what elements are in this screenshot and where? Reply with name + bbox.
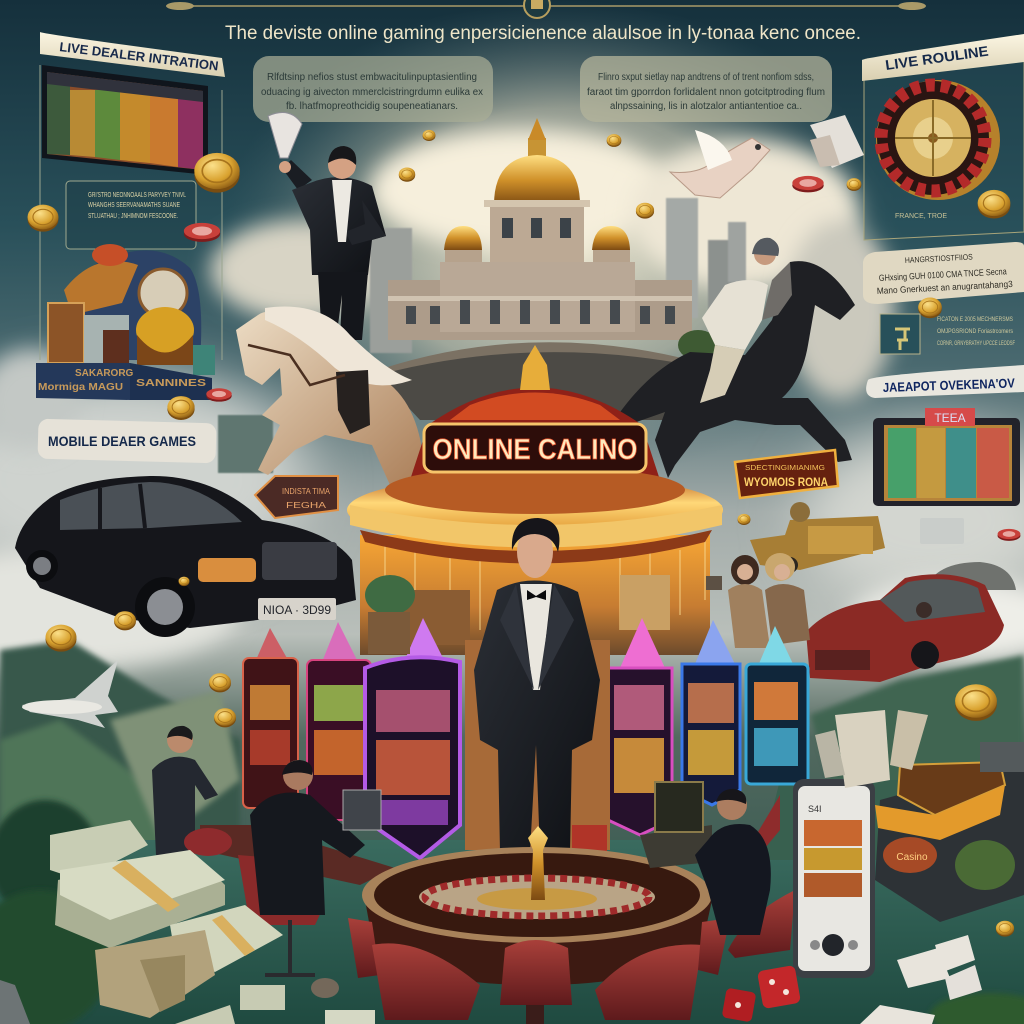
info text block — [66, 181, 196, 249]
slot 3 — [365, 618, 460, 858]
label: live dealer — [40, 32, 225, 77]
potted plant — [365, 575, 415, 654]
label: live roulette: LIVE ROULINE — [884, 43, 989, 73]
panel: live roulette — [862, 34, 1024, 398]
label: mobile dealer games — [38, 419, 216, 463]
mountains and landscape — [0, 640, 1024, 1024]
label: live dealer: LIVE DEALER INTRATION — [59, 39, 219, 73]
fan of cards — [268, 112, 302, 158]
callout: top left: Rlfdtsinp nefios stust embwacitulinpuptasientling — [267, 72, 477, 83]
callout: right: Mano Gnerkuest an anugrantahang3 — [877, 279, 1013, 296]
slot machines left — [243, 618, 460, 858]
icon: panel coin — [978, 190, 1010, 219]
dealer screen — [42, 65, 208, 175]
cards upper right — [810, 115, 864, 168]
slot 4 — [608, 618, 672, 835]
jackpot info text — [937, 316, 1015, 347]
caption: roulette: FRANCE, TROE — [895, 213, 947, 220]
red car — [806, 562, 1016, 682]
sign: online casino — [424, 424, 646, 472]
black car — [15, 476, 356, 637]
black car: NIOA · 3D99 — [263, 603, 331, 617]
smartphone — [793, 779, 875, 978]
roulette wheel — [876, 80, 1000, 200]
floating chips — [184, 176, 1020, 541]
callout: top right: alnpssaining, lis in alotzalor antiantentioe ca.. — [610, 101, 802, 112]
small sign left — [255, 476, 338, 518]
treasure slot chest — [875, 742, 1024, 922]
info text block: GRI'STRO NEONNOAALS PARYVEY TNIVL — [88, 192, 186, 199]
treasure slot chest: Casino — [896, 852, 928, 863]
sign: wyomois rona: WYOMOIS RONA — [744, 475, 828, 489]
stairs glow behind central man — [465, 640, 610, 850]
skyline buildings — [218, 198, 746, 473]
red chairs — [348, 795, 795, 1024]
palace — [378, 118, 718, 420]
carousel — [347, 345, 723, 655]
dealer with cards — [268, 112, 386, 340]
slot 5 — [682, 620, 740, 805]
black horse with rider — [618, 238, 855, 478]
panel: live dealer interaction — [40, 32, 225, 360]
flying pig — [670, 130, 770, 198]
label: jackpot — [866, 365, 1024, 398]
icon box — [880, 314, 920, 354]
callout: top left: oduacing ig aivecton mmerclcistringrdumn eulika ex — [261, 87, 483, 98]
roulette table — [362, 825, 712, 985]
gold truck — [750, 502, 885, 573]
standing croupier — [152, 726, 218, 855]
callout: top right: faraot tim gporrdon forlidalent nnon gotcitptroding flum — [587, 87, 825, 98]
info text block: STLUATHAU ; JNHIMNOM FESCOONE. — [88, 213, 178, 220]
ladies group — [706, 553, 810, 648]
icon: coin under callout — [918, 298, 942, 318]
top ornament — [166, 0, 926, 18]
white horse — [236, 307, 424, 485]
sign: wyomois rona — [735, 450, 838, 498]
slot booth left: SANNINES — [136, 378, 206, 389]
callout: right: HANGRSTIOSTFIIOS — [905, 252, 973, 265]
callout: top left: fb. lhatfmopreothcidig soupeneatianars. — [286, 101, 458, 112]
right game screen — [873, 408, 1020, 544]
label: mobile dealer games: MOBILE DEAER GAMES — [48, 433, 196, 449]
callout: top right: Flinro sxput sietlay nap andtrens of of trent nonfiom sdss, — [598, 72, 814, 83]
callout: top right — [580, 56, 832, 122]
money stacks — [50, 820, 375, 1024]
slot booth left — [36, 244, 215, 400]
info text block: WHANGHS SEERVANAMATHS SUANE — [88, 202, 180, 209]
sign: online casino: ONLINE CALINO — [432, 434, 638, 466]
playing cards — [815, 710, 982, 1024]
central host — [474, 518, 600, 852]
dice — [722, 965, 801, 1022]
callout: right — [863, 242, 1024, 304]
sign: wyomois rona: SDECTINGIMIANIMG — [745, 465, 825, 472]
smartphone: S4I — [808, 804, 822, 814]
plane — [22, 660, 118, 728]
title: The deviste online gaming enpersicienence alaulsoe in ly-tonaa kenc oncee. — [225, 23, 861, 44]
slot machines right — [608, 618, 808, 835]
slot 2 — [307, 622, 371, 820]
rock — [0, 980, 30, 1024]
seated player left — [184, 760, 395, 975]
seated player right — [640, 782, 771, 935]
rider — [700, 238, 779, 403]
floating coins — [28, 130, 1014, 937]
label: live roulette — [862, 34, 1024, 81]
callout: top left — [253, 56, 493, 122]
small sign left: INDISTA TIMA — [282, 487, 331, 496]
slot 1 — [243, 628, 298, 808]
small sign left: FEGHA — [286, 501, 327, 510]
slot 6 — [746, 626, 808, 784]
right game screen: TEEA — [934, 411, 966, 425]
slot booth left: SAKARORG — [75, 368, 134, 379]
slot booth left: Mormiga MAGU — [38, 382, 123, 393]
